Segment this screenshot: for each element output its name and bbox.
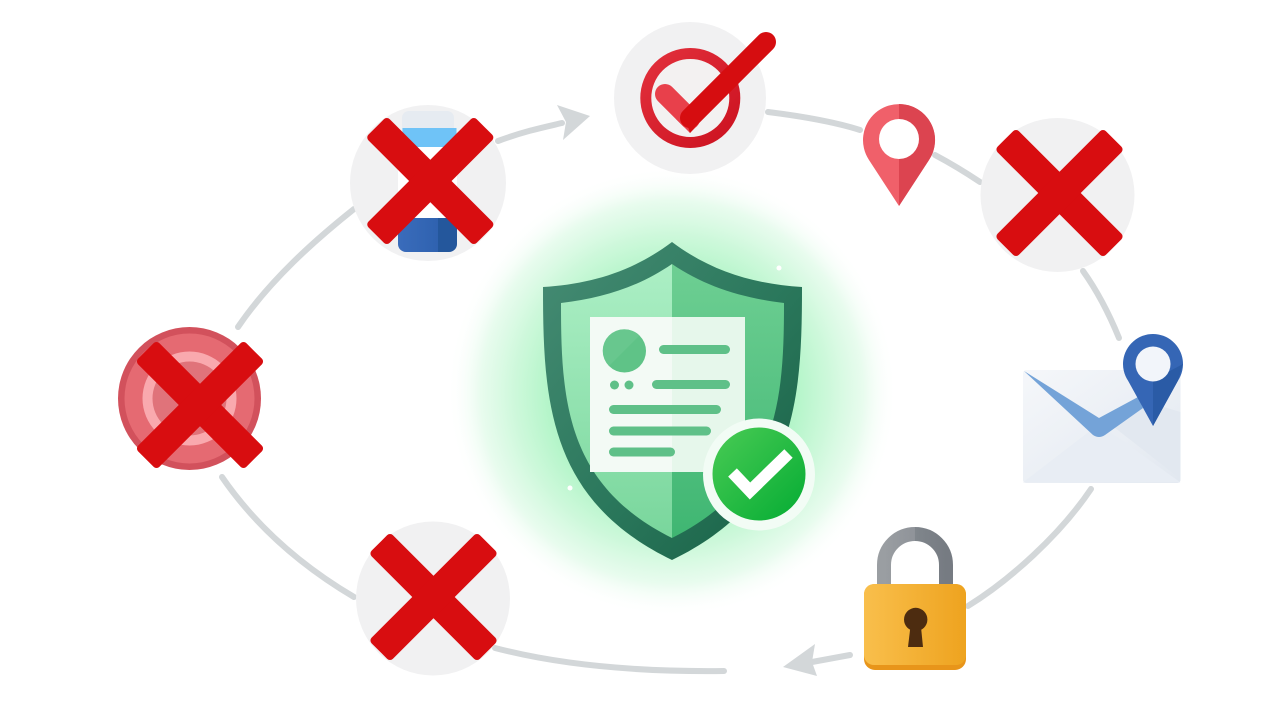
icon: blue pin [1123, 334, 1183, 426]
icon: crossed-out bottle [350, 105, 506, 261]
green check badge [703, 418, 815, 530]
green glow [447, 167, 897, 617]
arrow: top [557, 105, 590, 140]
document card [590, 317, 745, 472]
icon: top check mark [614, 22, 766, 174]
icon: crossed-out circle bottom [356, 522, 510, 676]
central shield [543, 242, 815, 560]
icon: crossed-out circle right [980, 118, 1134, 272]
icon: crossed-out target [118, 327, 265, 470]
icon: padlock [864, 534, 966, 670]
icon: red location pin [863, 104, 935, 206]
cycle ring segments [222, 112, 1119, 671]
icon: envelope with blue pin [1023, 334, 1183, 483]
arrow: bottom [783, 644, 817, 676]
sparkles [568, 266, 782, 490]
